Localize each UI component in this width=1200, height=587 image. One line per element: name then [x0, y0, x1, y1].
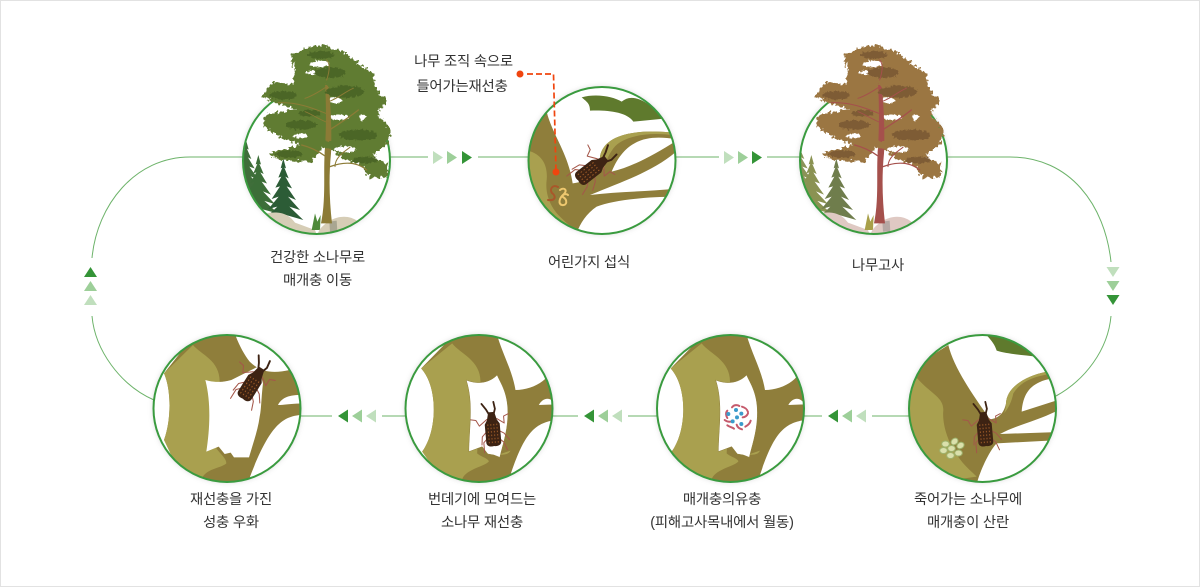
label: 어린가지 섭식 — [548, 254, 630, 271]
trunk with gallery — [421, 336, 552, 481]
branch illustration — [530, 96, 674, 229]
icon: nematode worms — [548, 186, 568, 205]
panel: dead pine — [781, 45, 947, 274]
icon: eggs — [940, 437, 965, 458]
label: 재선충을 가진 — [190, 491, 272, 508]
label: 나무고사 — [852, 257, 904, 274]
connector lines — [92, 157, 1111, 416]
arrow: down, right side — [1106, 267, 1120, 305]
label — [650, 491, 794, 531]
icon: pine tree — [262, 45, 392, 223]
trunk with gallery — [670, 336, 803, 481]
ground and firs — [228, 140, 362, 243]
label — [270, 249, 365, 289]
icon: beetle — [469, 401, 512, 454]
panel: pupa chamber — [406, 335, 564, 531]
label — [428, 491, 536, 531]
arrow: left, larva to pupa — [584, 410, 622, 422]
label: 매개충의유충 — [683, 491, 761, 508]
arrow: left, pupa to adult — [338, 410, 376, 422]
label: 매개충 이동 — [283, 272, 352, 289]
panel: twig feeding — [414, 53, 680, 271]
arrow: right, twig to dead pine — [724, 151, 762, 164]
ground and firs — [781, 140, 915, 243]
icon: dead pine tree — [815, 45, 945, 223]
label: 죽어가는 소나무에 — [914, 491, 1022, 508]
icon: beetle — [221, 348, 282, 413]
icon: beetle — [560, 135, 626, 198]
label: 건강한 소나무로 — [270, 249, 365, 266]
label: 성충 우화 — [203, 514, 259, 531]
label — [914, 491, 1022, 531]
label: 매개충이 산란 — [927, 514, 1009, 531]
branch illustration — [910, 336, 1055, 481]
label — [190, 491, 272, 531]
callout: nematode entering tissue: 나무 조직 속으로 — [414, 53, 513, 70]
callout: nematode entering tissue — [414, 53, 560, 176]
label: 소나무 재선충 — [441, 514, 523, 531]
panel: adult emergence — [154, 335, 308, 531]
label: 번데기에 모여드는 — [428, 491, 536, 508]
callout: nematode entering tissue: 들어가는재선충 — [416, 78, 508, 95]
arrow: up, left side — [84, 267, 97, 305]
panel: egg laying — [903, 335, 1060, 531]
icon: beetle — [961, 401, 1004, 454]
label: (피해고사목내에서 월동) — [650, 514, 794, 531]
panel: healthy pine — [228, 45, 392, 289]
icon: larvae and microbes — [725, 405, 751, 429]
arrow: right, healthy pine to twig — [433, 151, 472, 164]
trunk with exit hole — [164, 336, 300, 481]
arrow: left, egg to larva — [828, 410, 866, 422]
panel: overwintering larvae — [650, 335, 813, 531]
